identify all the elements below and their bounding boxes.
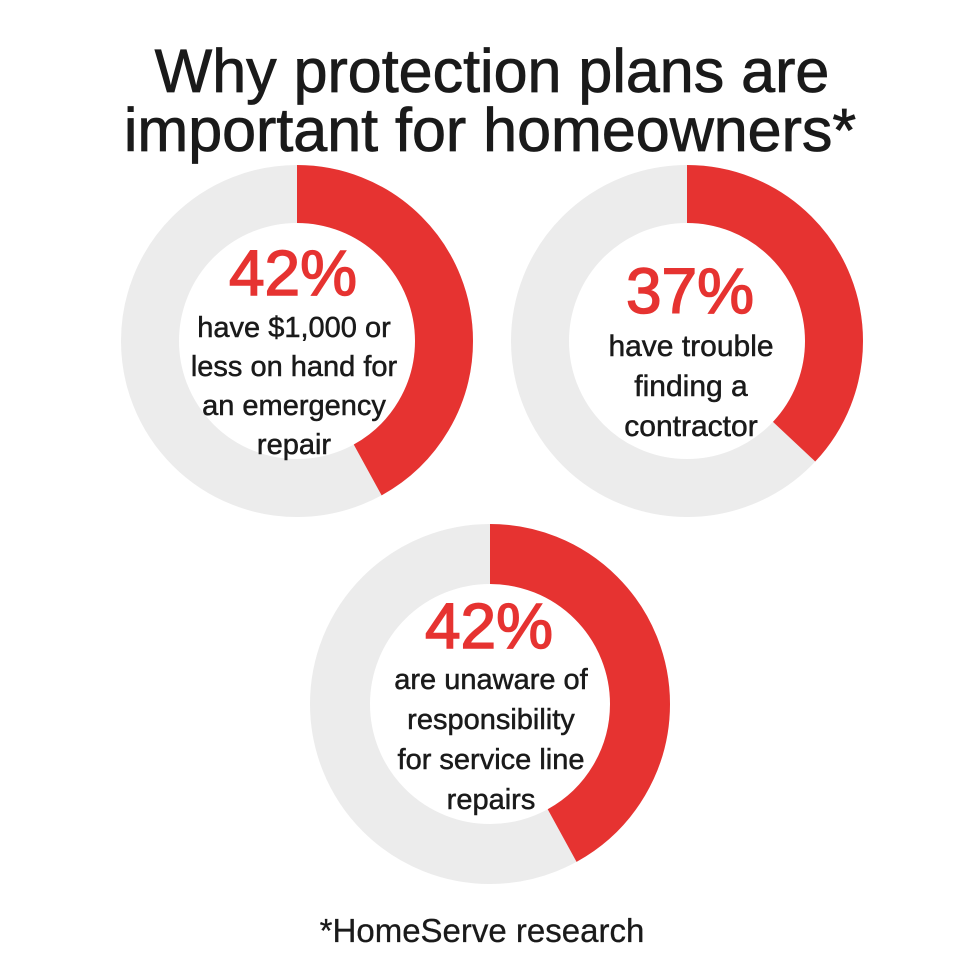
text: emergency: an emergency [202,390,386,422]
stat: 37%: 37% [626,255,754,327]
text: service line: are unaware of [394,664,589,696]
text: service line: for service line [398,744,584,776]
text: emergency [191,312,398,461]
title [124,37,856,164]
text: contractor: contractor [624,410,758,443]
title: Why protection plans are [155,37,829,105]
text: contractor: finding a [634,370,748,403]
text: emergency: have $1,000 or [197,312,391,344]
text: emergency: repair [257,429,331,461]
text: service line: responsibility [407,704,575,736]
panel: donut 42% emergency [150,194,444,488]
panel: donut 37% contractor [540,194,834,488]
panel: donut 42% service line [340,554,640,854]
text: contractor [608,330,774,443]
stat: 42%: 42% [229,237,357,309]
title: important for homeowners* [124,96,856,164]
footnote: *HomeServe research [320,912,644,949]
text: contractor: have trouble [608,330,774,363]
stat: 42%: 42% [425,590,553,662]
text: service line [394,664,589,816]
text: service line: repairs [447,784,535,816]
text: emergency: less on hand for [191,351,398,383]
